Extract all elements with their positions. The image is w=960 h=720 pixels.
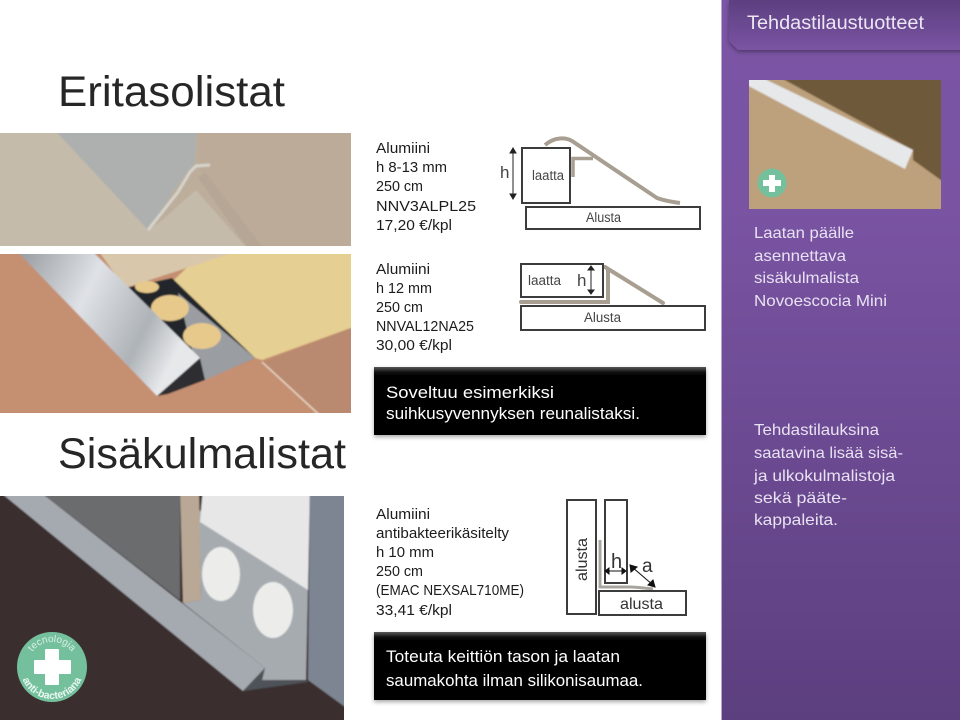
text block: product 1 specifications: NNV3ALPL25 (376, 199, 476, 215)
heading: Sisäkulmalistat: Sisäkulmalistat (58, 430, 346, 478)
diagram: inner corner profile cross-section (567, 500, 686, 615)
text block: product 3 specifications: 250 cm (376, 564, 423, 580)
text block: factory order options: kappaleita. (754, 512, 838, 529)
panel: factory order products (721, 0, 960, 720)
diagram: inner corner profile cross-section: alusta (574, 538, 591, 581)
icon: anti-bacterial badge: anti-bacteriana (23, 678, 82, 699)
diagram: inner corner profile cross-section: h (611, 551, 622, 573)
callout: suitability note: Soveltuu esimerkiksi (386, 384, 554, 402)
text block: product 2 specifications: h 12 mm (376, 281, 432, 297)
text block: factory order options: ja ulkokulmalistoja (753, 468, 895, 485)
photo: white corner profile (749, 80, 941, 209)
photo: grey corner profile with dark floor (0, 488, 352, 720)
text block: on-tile corner profile: sisäkulmalista (754, 270, 859, 287)
text block: product 3 specifications: 33,41 €/kpl (376, 603, 452, 619)
text block: product 3 specifications: h 10 mm (376, 545, 434, 561)
text block: product 1 specifications: 250 cm (376, 179, 423, 195)
text block: factory order options: sekä pääte- (754, 490, 847, 507)
callout: kitchen level note (374, 632, 706, 700)
text block: product 2 specifications: Alumiini (376, 262, 430, 278)
diagram: profile 1 cross-section: laatta (532, 168, 564, 183)
diagram: profile 2 cross-section: laatta (528, 273, 561, 288)
text block: product 3 specifications: antibakteerikäsitelty (376, 526, 510, 542)
text block: product 2 specifications: 30,00 €/kpl (376, 338, 452, 354)
text block: on-tile corner profile: Laatan päälle (754, 225, 854, 242)
diagram: inner corner profile cross-section: alusta (620, 596, 663, 613)
text block: product 1 specifications: h 8-13 mm (376, 160, 447, 176)
diagram: profile 1 cross-section (500, 138, 700, 229)
diagram: profile 2 cross-section: Alusta (584, 310, 621, 325)
callout: suitability note (374, 367, 706, 435)
panel header (729, 0, 960, 50)
text block: product 2 specifications: NNVAL12NA25 (376, 319, 474, 335)
title: Eritasolistat: Eritasolistat (58, 68, 285, 116)
text block: on-tile corner profile: Novoescocia Mini (754, 293, 887, 310)
text block: on-tile corner profile (754, 225, 887, 310)
text block: factory order options: saatavina lisää sisä- (754, 445, 903, 462)
callout: kitchen level note: Toteuta keittiön tason ja laatan (386, 648, 620, 666)
text block: product 3 specifications: (EMAC NEXSAL710ME) (376, 583, 524, 599)
photo: metal profile on terracotta floor (0, 254, 351, 413)
text block: product 2 specifications (376, 262, 474, 354)
text block: factory order options: Tehdastilauksina (754, 422, 879, 439)
diagram: profile 1 cross-section: Alusta (586, 210, 621, 225)
callout: kitchen level note: saumakohta ilman silikonisaumaa. (386, 672, 643, 690)
text block: product 1 specifications (376, 141, 476, 234)
icon: anti-bacterial badge (17, 632, 87, 702)
text block: product 2 specifications: 250 cm (376, 300, 423, 316)
diagram: profile 2 cross-section: h (577, 271, 586, 290)
diagram: profile 2 cross-section (521, 264, 705, 330)
panel heading text: Tehdastilaustuotteet (747, 13, 925, 34)
photo: pale stone tile trim (0, 133, 351, 246)
text block: on-tile corner profile: asennettava (754, 248, 846, 265)
text block: product 1 specifications: 17,20 €/kpl (376, 218, 452, 234)
text block: product 3 specifications: Alumiini (376, 507, 430, 523)
diagram: profile 1 cross-section: h (500, 163, 509, 182)
diagram: inner corner profile cross-section: a (642, 556, 653, 577)
text block: product 3 specifications (376, 507, 524, 619)
callout: suitability note: suihkusyvennyksen reunalistaksi. (386, 405, 640, 423)
icon: anti-bacterial badge: tecnologia (28, 634, 75, 652)
text block: factory order options (753, 422, 903, 529)
text block: product 1 specifications: Alumiini (376, 141, 430, 157)
